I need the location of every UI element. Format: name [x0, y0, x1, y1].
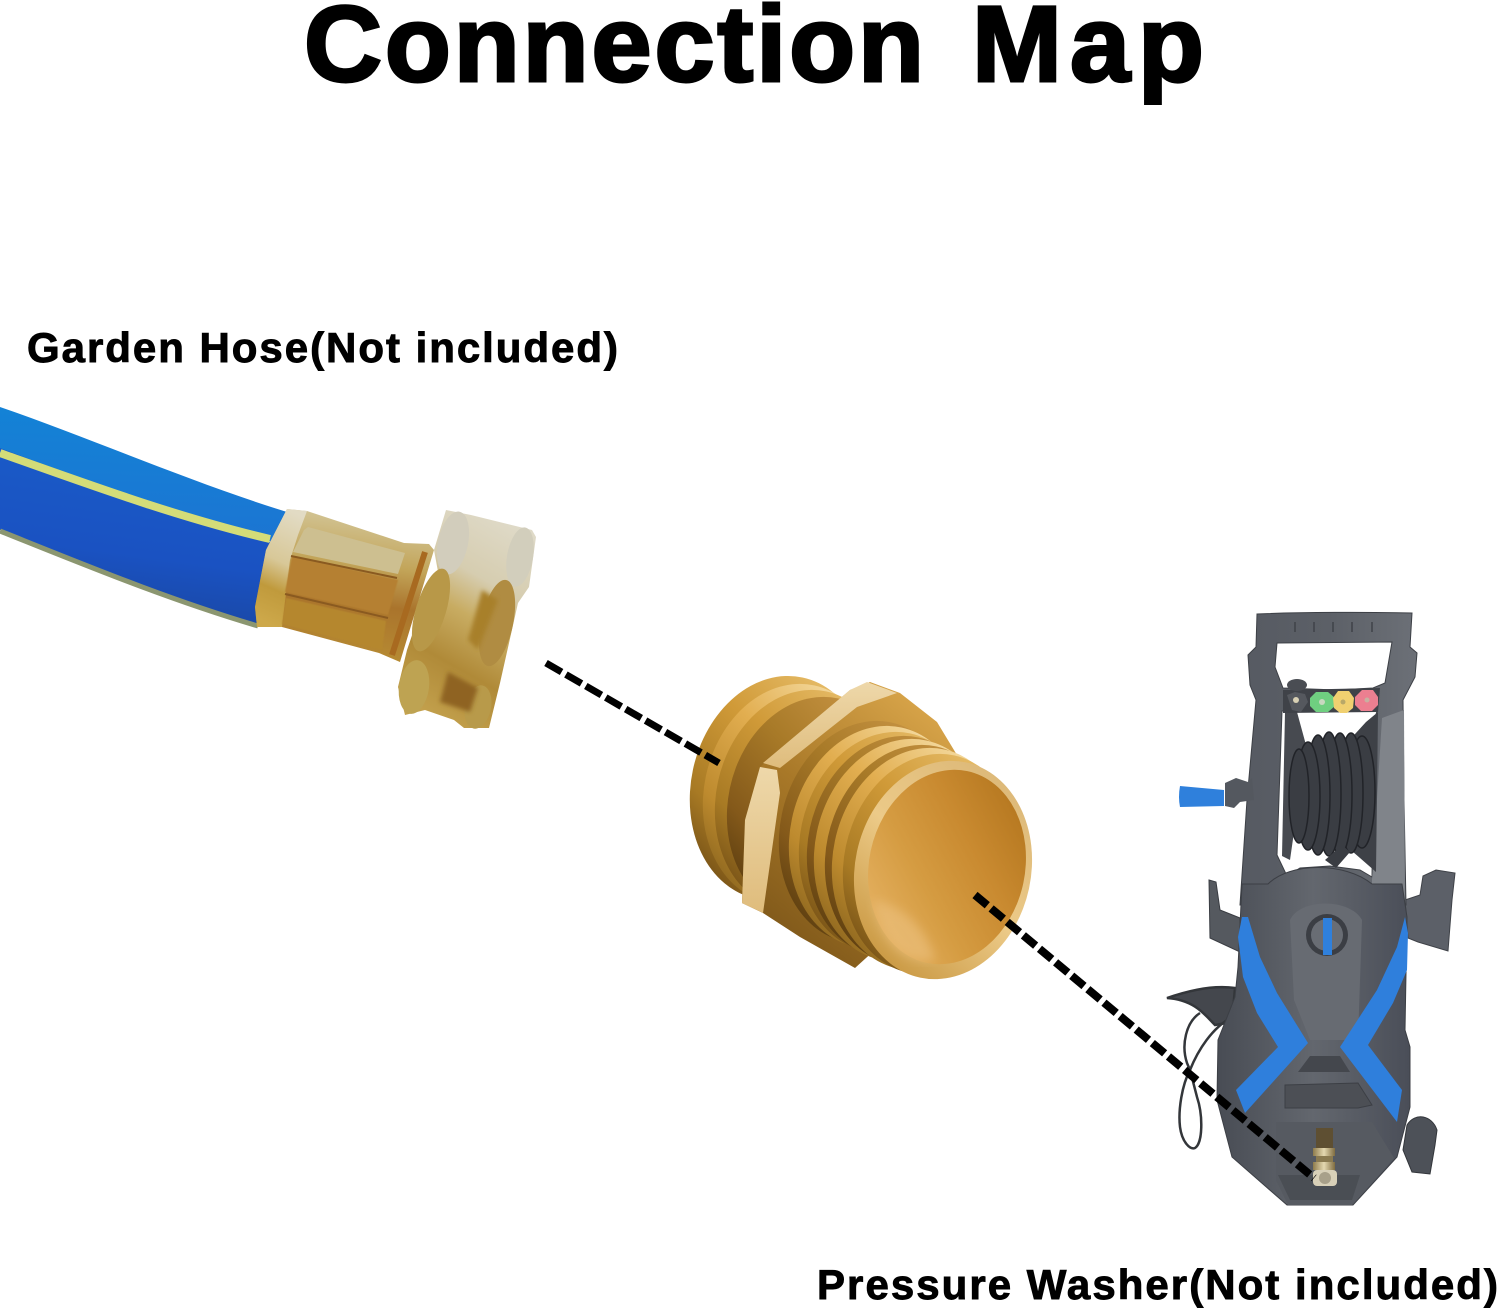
hose tube: [0, 407, 287, 627]
blue X trim: left: [1236, 917, 1308, 1113]
hose reel: [1282, 712, 1378, 872]
nozzle: pink: [1355, 690, 1378, 711]
hex nut: [395, 509, 538, 731]
label: pressure washer: Pressure Washer(Not included): [817, 1261, 1498, 1308]
illustration: garden hose with brass coupling: [0, 407, 538, 731]
left thread bands: [669, 659, 923, 932]
handle window: [1275, 642, 1392, 690]
bottom right cup: [1403, 1117, 1437, 1174]
open end face: [834, 744, 1052, 996]
brass outlet connector: [1313, 1128, 1337, 1186]
reel window: [1277, 711, 1377, 877]
left side hook: [1209, 880, 1240, 952]
nozzle: green: [1310, 692, 1335, 712]
power cord and plug: [1167, 987, 1235, 1148]
nozzle: yellow: [1333, 691, 1354, 713]
right frame facet: [1372, 710, 1405, 902]
switch dial: [1306, 914, 1348, 956]
washer frame and handle: [1240, 612, 1417, 905]
nozzle: black: [1287, 692, 1308, 712]
blue X trim: right: [1340, 917, 1408, 1122]
dashed connector: hose to adapter: [546, 663, 719, 763]
label: garden hose: Garden Hose(Not included): [27, 324, 618, 371]
center console: [1290, 904, 1362, 1040]
hex flange: [742, 682, 960, 968]
washer body shell: [1217, 868, 1410, 1205]
right side holster: [1405, 870, 1455, 951]
handle grip ribs: [1295, 622, 1372, 632]
illustration: brass double male adapter: [669, 659, 1052, 996]
brass ferrule: [255, 509, 434, 662]
right thread bands: [759, 704, 1039, 991]
blue water inlet valve: [1179, 778, 1254, 808]
illustration: pressure washer: [1167, 612, 1455, 1205]
dashed connector: adapter to pressure washer: [975, 895, 1314, 1178]
lower panels: [1276, 1056, 1394, 1205]
nozzle strip: [1283, 679, 1380, 713]
